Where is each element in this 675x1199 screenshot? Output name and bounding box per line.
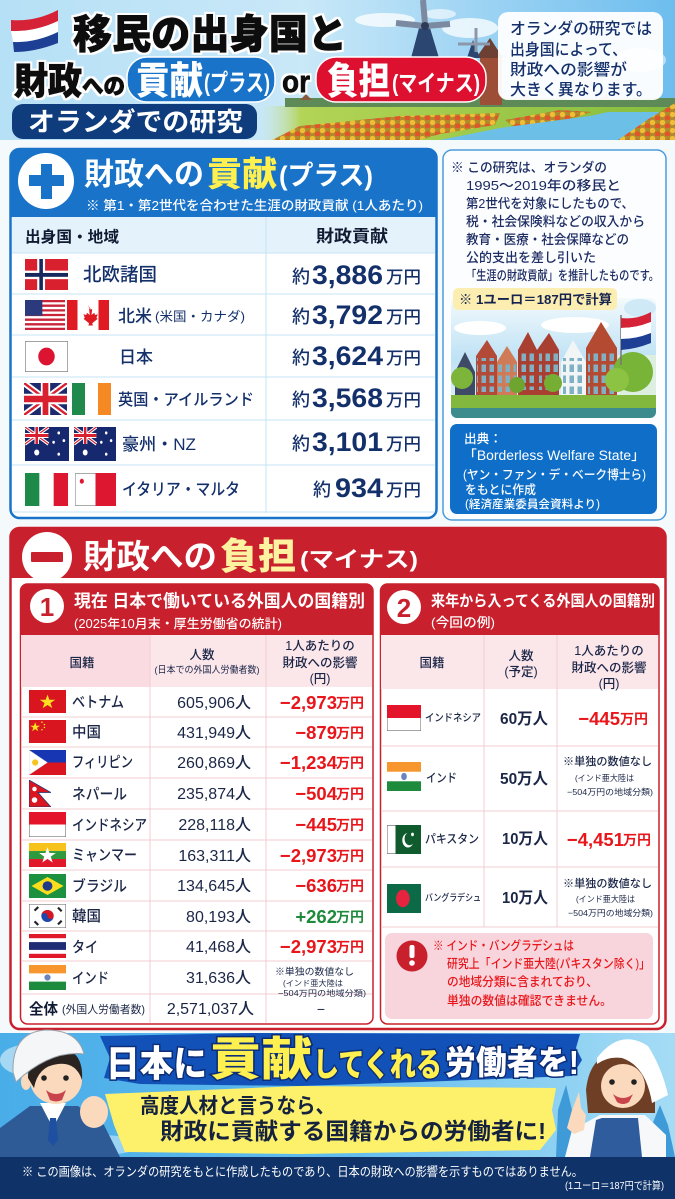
- row: Pakistan: 10万人: [502, 831, 548, 848]
- row: Brazil: [29, 874, 364, 898]
- row: China: [29, 720, 364, 743]
- sub-panel 1 header: 現在 日本で働いている外国人の国籍別: [74, 591, 365, 611]
- heading: (マイナス): [300, 547, 418, 572]
- background: sky: [0, 1033, 675, 1157]
- row: Brazil: 134,645人: [177, 878, 251, 895]
- row: North America: 万円: [386, 308, 421, 327]
- table: contribution by origin: [12, 217, 435, 513]
- row: North America: [25, 300, 421, 330]
- row: Indonesia: 万円: [336, 817, 364, 833]
- callout: India and Bangladesh warning: [385, 933, 653, 1019]
- row: Myanmar: [29, 843, 364, 867]
- callout: India and Bangladesh warning: 研究上「インド亜大陸(パキスタン除く)」: [447, 956, 650, 971]
- badge: contribution (plus): [127, 57, 275, 103]
- sub-panel 1 header: [20, 584, 373, 635]
- row: Vietnam: 万円: [336, 695, 364, 711]
- title line 2: への: [82, 74, 125, 99]
- row: Australia and NZ: 約: [292, 434, 310, 454]
- row: Myanmar: −2,973: [280, 845, 337, 866]
- row: Vietnam: [29, 690, 364, 713]
- row: Pakistan: [387, 825, 651, 854]
- row: Pakistan: −4,451: [567, 829, 624, 850]
- headline: [106, 1033, 579, 1085]
- row: Philippines: 260,869人: [177, 755, 251, 772]
- subheading: ※ 第1・第2世代を合わせた生涯の財政貢献 (1人あたり): [86, 198, 423, 213]
- footer disclaimer: [0, 1157, 675, 1199]
- panel: fiscal burden: [10, 528, 666, 1029]
- sub-panel 1 header: (2025年10月末・厚生労働省の統計): [74, 616, 282, 631]
- row: North America: 約: [292, 307, 310, 327]
- source box: 「Borderless Welfare State」: [463, 448, 645, 463]
- row: Thailand: 万円: [336, 939, 364, 955]
- row: Indonesia: 万円: [620, 711, 648, 727]
- row: Philippines: フィリピン: [72, 754, 133, 771]
- heading: 財政への: [84, 157, 204, 192]
- headline: 労働者を!: [445, 1044, 579, 1081]
- row: China: 万円: [336, 725, 364, 741]
- row: Japan: 万円: [386, 349, 421, 368]
- row: Italy and Malta: 万円: [386, 481, 421, 500]
- row: South Korea: +262: [295, 906, 337, 927]
- row: North America: (米国・カナダ): [155, 309, 245, 324]
- row: Japan: 約: [292, 348, 310, 368]
- callout: exchange rate: ※ 1ユーロ＝187円で計算: [459, 292, 612, 307]
- row: total: 2,571,037人: [167, 1001, 254, 1018]
- table header: (日本での外国人労働者数): [154, 664, 260, 676]
- icon: number 2: 2: [397, 593, 411, 623]
- subtitle pill: オランダでの研究: [28, 107, 243, 137]
- row: China: −879: [295, 722, 337, 743]
- callout: summary note: 財政への影響が: [510, 60, 627, 79]
- title line 2: 財政: [14, 61, 82, 102]
- row: India: ※単独の数値なし: [275, 966, 354, 978]
- footer disclaimer: ※ この画像は、オランダの研究をもとに作成したものであり、日本の財政への影響を示すものではありません。: [22, 1164, 583, 1179]
- row: Pakistan: パキスタン: [425, 832, 479, 846]
- callout: India and Bangladesh warning: ※ インド・バングラデシュは: [433, 938, 574, 953]
- title line 2: or: [282, 64, 310, 99]
- panel: fiscal contribution: [10, 149, 437, 518]
- source box: (経済産業委員会資料より): [465, 497, 600, 511]
- headline: 日本に: [106, 1043, 207, 1084]
- sub-panel 2 header: [380, 584, 659, 635]
- illustration: Dutch canal houses: [451, 298, 656, 418]
- table header: 財政への影響: [571, 660, 647, 675]
- illustration: sky and Dutch landscape: [0, 0, 675, 140]
- row: Nordics: 北欧諸国: [83, 264, 157, 285]
- row: total: [29, 1000, 325, 1018]
- row: Thailand: タイ: [72, 939, 98, 956]
- row: India: (インド亜大陸は: [283, 978, 343, 988]
- row: India: 31,636人: [186, 970, 251, 987]
- row: China: 中国: [72, 724, 101, 741]
- row: Myanmar: 万円: [336, 848, 364, 864]
- table header: (円): [310, 672, 330, 686]
- badge: burden (minus): (マイナス): [392, 70, 480, 96]
- row: India: 50万人: [500, 771, 548, 788]
- row: Brazil: ブラジル: [72, 877, 127, 895]
- table header: [21, 635, 372, 687]
- table header: 1人あたりの: [574, 644, 644, 658]
- row: North America: 3,792: [312, 300, 383, 330]
- row: Philippines: −1,234: [280, 752, 338, 773]
- message line 2: 財政に貢献する国籍からの労働者に!: [160, 1118, 546, 1144]
- callout: exchange rate: [453, 288, 617, 310]
- table header: 国籍: [419, 655, 445, 670]
- table header: (予定): [504, 665, 538, 679]
- row: Brazil: 万円: [336, 878, 364, 894]
- callout: summary note: オランダの研究では: [510, 19, 652, 38]
- row: total: 全体: [29, 1000, 58, 1018]
- table: workers by nationality: [21, 635, 372, 1023]
- headline: 貢献: [210, 1033, 312, 1085]
- table header: 財政への影響: [282, 655, 358, 670]
- table header: (円): [599, 677, 619, 691]
- source box: をもとに作成: [465, 482, 536, 497]
- table header: [25, 226, 388, 246]
- title line 1: 移民の出身国と: [73, 13, 347, 57]
- row: China: 431,949人: [177, 725, 251, 742]
- row: Myanmar: ミャンマー: [72, 847, 137, 864]
- sub-panel 2 header: (今回の例): [431, 615, 495, 630]
- row: Nepal: −504: [295, 783, 338, 804]
- row: Italy and Malta: 約: [313, 480, 331, 500]
- text: study description: 第2世代を対象にしたもので、: [466, 195, 634, 211]
- sub-panel 2: incoming workers: [380, 584, 659, 1024]
- text: study description: 公的支出を差し引いた: [466, 250, 596, 265]
- row: Japan: 日本: [119, 348, 153, 367]
- icon: plus: [18, 153, 74, 209]
- row: total: (外国人労働者数): [62, 1002, 145, 1016]
- heading: 貢献: [207, 156, 277, 194]
- brush: blue headline band: [100, 1033, 582, 1086]
- row: India: インド: [426, 771, 457, 785]
- row: Indonesia: −445: [578, 708, 620, 729]
- row: India: (インド亜大陸は: [575, 773, 634, 783]
- sub-panel 2 header: 来年から入ってくる外国人の国籍別: [431, 591, 655, 610]
- badge: burden (minus): 負担: [327, 61, 390, 103]
- source box: [450, 424, 657, 514]
- sub-panel 1: current workers: [20, 584, 373, 1024]
- text: study description: ※ この研究は、オランダの: [451, 159, 607, 175]
- row: India: −504万円の地域分類): [278, 988, 366, 998]
- callout: India and Bangladesh warning: の地域分類に含まれており、: [447, 974, 598, 989]
- panel: study notes: [443, 150, 666, 520]
- table header: 財政貢献: [316, 226, 388, 246]
- row: Philippines: 万円: [336, 755, 364, 771]
- row: Thailand: 41,468人: [186, 939, 251, 956]
- row: Nordics: [25, 259, 421, 290]
- title line 2: [14, 57, 486, 103]
- row: Bangladesh: [387, 876, 653, 918]
- row: Japan: 3,624: [312, 341, 383, 371]
- row: Myanmar: 163,311人: [178, 848, 251, 865]
- row: UK and Ireland: 万円: [386, 391, 421, 410]
- row: South Korea: 80,193人: [186, 909, 251, 926]
- table header: 人数: [508, 648, 534, 663]
- source box: 出典：: [464, 432, 502, 446]
- callout: summary note: [498, 12, 663, 100]
- row: total: −: [317, 1001, 325, 1017]
- icon: minus: [22, 532, 72, 582]
- row: Nordics: 万円: [386, 268, 421, 287]
- table header: 人数: [189, 647, 215, 662]
- row: Indonesia: 228,118人: [178, 817, 251, 834]
- row: Australia and NZ: 万円: [386, 435, 421, 454]
- row: Nepal: 235,874人: [177, 786, 251, 803]
- text: study description: 教育・医療・社会保障などの: [466, 231, 629, 247]
- icon: exclamation: [396, 940, 428, 972]
- row: Thailand: [29, 934, 364, 958]
- row: Indonesia: [387, 705, 648, 731]
- row: Indonesia: インドネシア: [425, 712, 481, 724]
- panel header: [10, 149, 437, 217]
- row: UK and Ireland: 英国・アイルランド: [118, 391, 254, 409]
- row: Bangladesh: バングラデシュ: [425, 892, 481, 904]
- row: India: インド: [72, 970, 109, 987]
- illustration: male worker: [0, 1030, 120, 1157]
- row: Bangladesh: (インド亜大陸は: [576, 894, 635, 904]
- row: South Korea: 韓国: [72, 907, 101, 925]
- brush: yellow message band: [105, 1086, 556, 1154]
- row: Bangladesh: −504万円の地域分類): [568, 908, 653, 918]
- callout: summary note: 大きく異なります。: [510, 81, 652, 99]
- row: Vietnam: 605,906人: [177, 695, 251, 712]
- closing banner: [0, 1030, 675, 1157]
- row: Nepal: 万円: [336, 786, 364, 802]
- row: Bangladesh: ※単独の数値なし: [563, 876, 652, 890]
- row: Vietnam: ベトナム: [72, 694, 124, 711]
- panel header: [10, 528, 666, 582]
- row: Thailand: −2,973: [280, 936, 337, 957]
- badge: burden (minus): [316, 57, 486, 103]
- row: Bangladesh: 10万人: [502, 890, 548, 907]
- row: India: −504万円の地域分類): [567, 787, 653, 797]
- row: Nepal: [29, 780, 364, 807]
- heading: [84, 156, 373, 194]
- row: Pakistan: 万円: [623, 832, 651, 848]
- source box: (ヤン・ファン・デ・ベーク博士ら): [463, 467, 646, 482]
- row: India: [387, 754, 653, 797]
- heading: [83, 536, 418, 577]
- message line 1: 高度人材と言うなら、: [140, 1095, 335, 1118]
- icon: number 1: [30, 589, 64, 623]
- row: Nordics: 約: [292, 267, 310, 287]
- row: UK and Ireland: 約: [292, 390, 310, 410]
- table header: 出身国・地域: [25, 228, 119, 246]
- illustration: female worker: [565, 1039, 668, 1157]
- row: Brazil: −636: [295, 875, 337, 896]
- row: Italy and Malta: [25, 473, 421, 506]
- icon: number 2: [387, 590, 421, 624]
- row: South Korea: 万円: [336, 909, 364, 925]
- table header: 1人あたりの: [285, 639, 355, 653]
- table header: [381, 635, 658, 691]
- row: Indonesia: インドネシア: [72, 817, 147, 834]
- header banner: [0, 0, 675, 140]
- row: Nepal: ネパール: [72, 786, 127, 803]
- table header: 国籍: [69, 655, 95, 670]
- icon: number 1: 1: [40, 592, 54, 622]
- table: planned intake: [381, 635, 658, 927]
- row: South Korea: [29, 904, 364, 928]
- row: Australia and NZ: 豪州・NZ: [122, 434, 196, 454]
- badge: contribution (plus): 貢献: [136, 61, 203, 103]
- row: Japan: [25, 341, 421, 372]
- row: Indonesia: [29, 812, 364, 837]
- text: study description: [451, 159, 659, 283]
- row: Italy and Malta: 934: [335, 473, 383, 503]
- headline: してくれる: [313, 1046, 442, 1083]
- callout: summary note: 出身国によって、: [510, 41, 627, 59]
- row: India: ※単独の数値なし: [563, 754, 652, 768]
- text: study description: 1995～2019年の移民と: [466, 177, 621, 193]
- row: Indonesia: 60万人: [500, 711, 548, 728]
- text: study description: 税・社会保険料などの収入から: [466, 214, 645, 229]
- row: North America: 北米: [118, 307, 152, 326]
- badge: contribution (plus): (プラス): [204, 70, 270, 97]
- row: Australia and NZ: [25, 427, 421, 461]
- icon: Netherlands flag: [11, 10, 58, 52]
- heading: 財政への: [83, 538, 217, 575]
- heading: 負担: [220, 536, 296, 577]
- row: Nordics: 3,886: [312, 260, 383, 290]
- row: UK and Ireland: 3,568: [312, 383, 383, 413]
- row: Australia and NZ: 3,101: [312, 427, 383, 457]
- row: India: [29, 965, 366, 998]
- heading: (プラス): [279, 161, 373, 191]
- row: UK and Ireland: [24, 383, 421, 415]
- row: Philippines: [29, 750, 364, 775]
- row: Indonesia: −445: [295, 814, 337, 835]
- row: Vietnam: −2,973: [280, 692, 337, 713]
- row: Italy and Malta: イタリア・マルタ: [122, 480, 240, 499]
- callout: India and Bangladesh warning: 単独の数値は確認できません。: [447, 993, 612, 1008]
